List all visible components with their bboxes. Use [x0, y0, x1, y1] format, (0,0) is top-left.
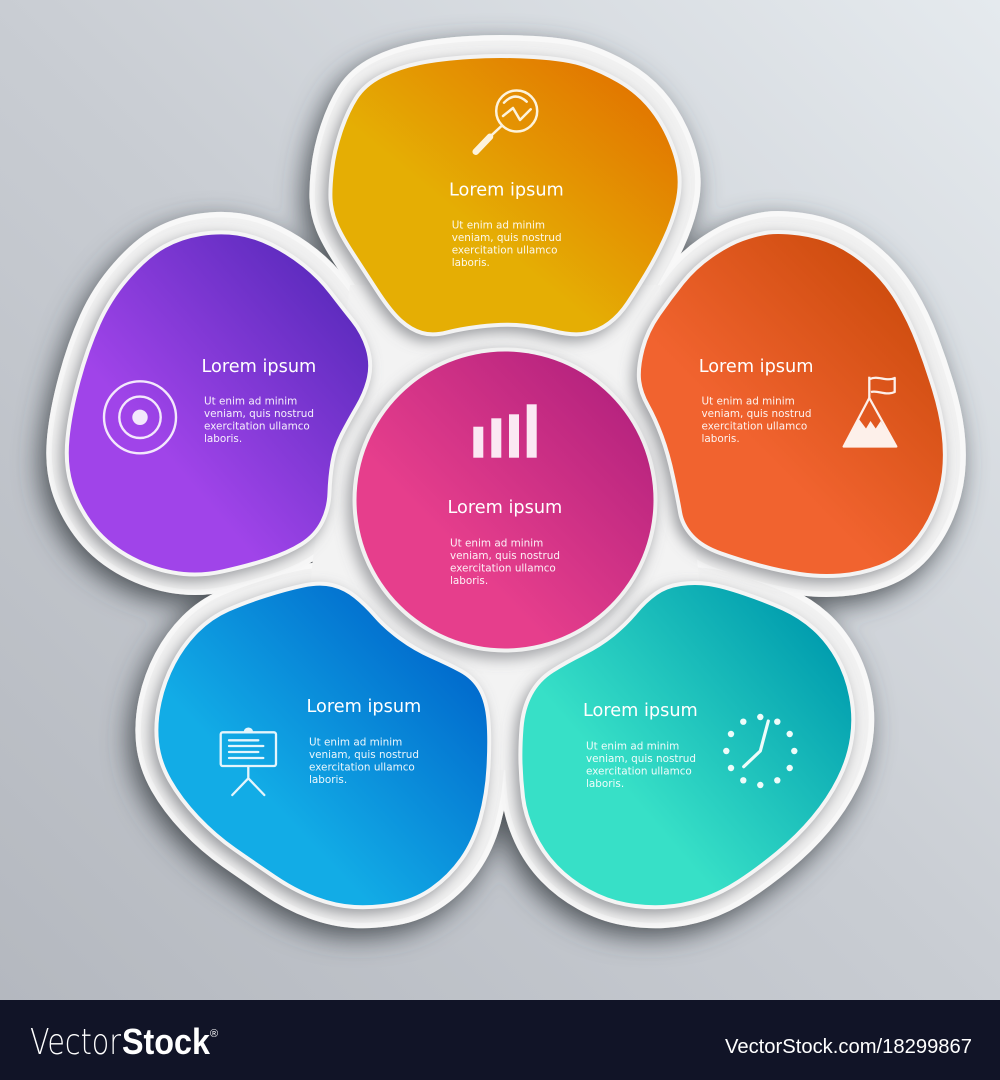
icon: clock	[723, 714, 798, 788]
footer image id: VectorStock.com/18299867	[725, 1035, 972, 1058]
text block: laboris.	[309, 774, 347, 786]
panel: purple left petal	[65, 234, 368, 578]
panel: orange right petal	[637, 234, 943, 579]
panel: teal lower-right petal	[518, 585, 851, 910]
icon: mountain with flag	[844, 377, 896, 447]
registered mark: ®	[210, 1028, 218, 1040]
footer logo	[30, 1021, 211, 1063]
panel: yellow top petal	[328, 58, 678, 337]
heading: Lorem ipsum	[583, 701, 698, 721]
heading: Lorem ipsum	[202, 357, 316, 377]
footer logo: Stock	[122, 1021, 211, 1062]
text block: laboris.	[586, 778, 624, 790]
text block: Ut enim ad minim	[586, 740, 679, 752]
text block: exercitation ullamco	[309, 762, 415, 774]
text block: veniam, quis nostrud	[586, 753, 696, 765]
text block: laboris.	[204, 433, 242, 445]
icon: bar chart	[473, 404, 537, 458]
text block: veniam, quis nostrud	[450, 550, 560, 562]
text block: Ut enim ad minim	[452, 220, 545, 232]
heading: Lorem ipsum	[448, 498, 562, 518]
text block: laboris.	[450, 575, 488, 587]
text block: exercitation ullamco	[450, 562, 556, 574]
white flower-shaped base plate	[69, 58, 943, 905]
text block: veniam, quis nostrud	[204, 408, 314, 420]
text block: laboris.	[702, 433, 740, 445]
text block: veniam, quis nostrud	[452, 232, 562, 244]
icon: target	[104, 381, 176, 453]
panel: blue lower-left petal	[154, 586, 487, 910]
footer logo: Vector	[30, 1022, 121, 1063]
footer bar	[0, 1000, 1000, 1080]
text block: exercitation ullamco	[204, 420, 310, 432]
text block: veniam, quis nostrud	[702, 408, 811, 420]
text block: exercitation ullamco	[586, 766, 692, 778]
text block: veniam, quis nostrud	[309, 749, 419, 761]
text block: laboris.	[452, 257, 490, 269]
icon: presentation board	[221, 729, 276, 795]
text block: exercitation ullamco	[452, 244, 558, 256]
text block: Ut enim ad minim	[450, 538, 543, 550]
text block: Ut enim ad minim	[309, 736, 402, 748]
panel: pink centre circle	[347, 351, 655, 659]
text block: Ut enim ad minim	[204, 396, 297, 408]
heading: Lorem ipsum	[699, 357, 813, 377]
text block: Ut enim ad minim	[702, 396, 795, 408]
text block: exercitation ullamco	[702, 420, 807, 432]
icon: magnifier with chart	[476, 90, 537, 152]
heading: Lorem ipsum	[306, 697, 421, 717]
heading: Lorem ipsum	[449, 180, 564, 200]
